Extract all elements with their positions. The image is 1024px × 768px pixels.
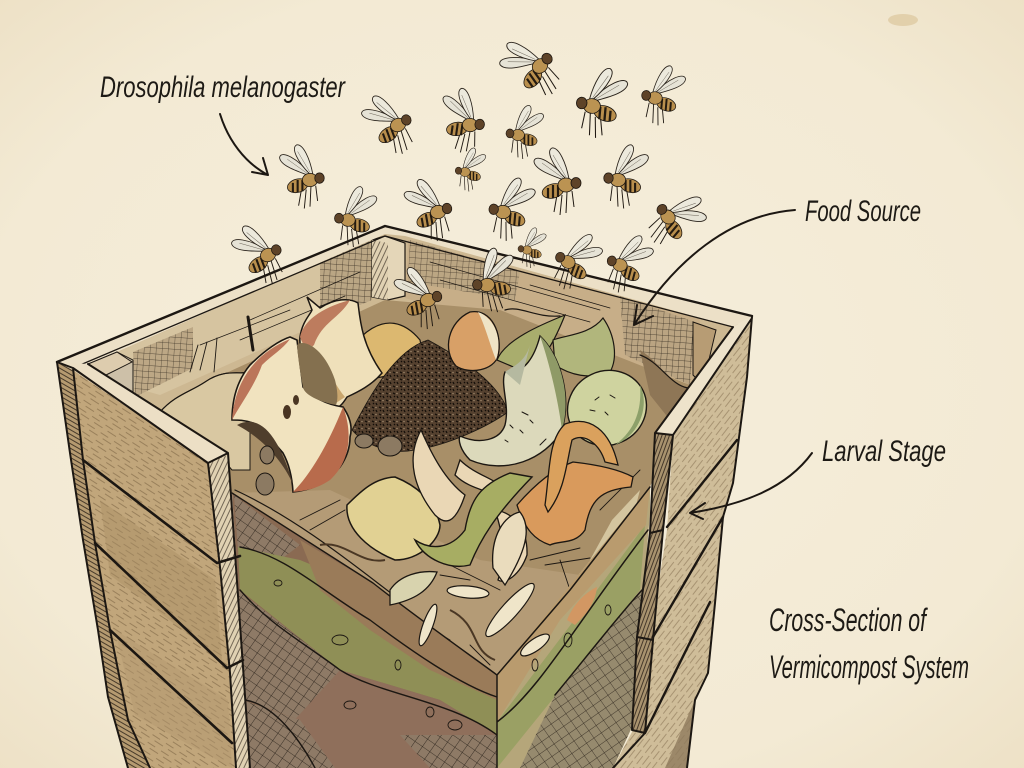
arrow: to fly	[220, 114, 268, 175]
onion	[448, 312, 499, 371]
compost surface	[160, 300, 690, 675]
arrow: to food	[634, 210, 795, 325]
green peel	[415, 473, 532, 566]
back interior walls	[88, 232, 742, 430]
cucumber slice	[555, 358, 659, 458]
apple core back	[300, 297, 382, 407]
yellow scrap	[359, 323, 421, 378]
apple core front	[232, 317, 351, 492]
green leaves	[497, 315, 614, 376]
arrow: to larvae	[690, 453, 812, 519]
right inner post	[693, 322, 716, 385]
back corner post	[372, 236, 405, 300]
coffee beans	[256, 434, 402, 495]
caption: title	[769, 602, 969, 685]
pale squash	[347, 477, 440, 560]
mushroom scraps	[390, 430, 527, 605]
label: Drosophila melanogaster: Drosophila melanogaster	[100, 71, 346, 104]
cross-section left face	[232, 493, 497, 768]
compost bin	[57, 226, 752, 768]
caption: title: Cross-Section of	[769, 602, 928, 638]
label: Larval Stage: Larval Stage	[822, 435, 946, 468]
cross-section right face	[497, 487, 650, 768]
right wall	[613, 316, 752, 768]
rim: back edges	[57, 226, 752, 392]
melon rind	[459, 336, 566, 466]
label: Food Source: Food Source	[805, 195, 921, 228]
dark soil heap	[352, 340, 508, 451]
fruit flies swarm	[227, 27, 714, 333]
larvae	[416, 579, 552, 660]
left wall	[57, 362, 250, 768]
orange peel	[517, 421, 633, 545]
